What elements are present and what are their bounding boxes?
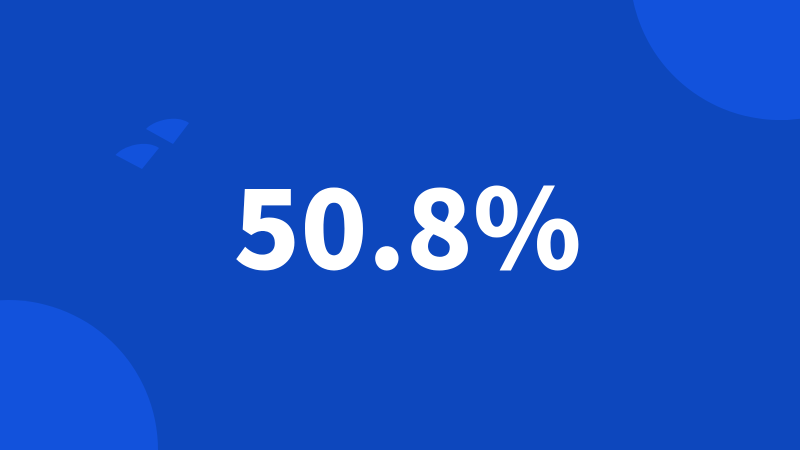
circle: top right — [633, 0, 800, 120]
icon: twin fan logo — [116, 119, 189, 169]
circle: bottom left — [0, 300, 158, 450]
